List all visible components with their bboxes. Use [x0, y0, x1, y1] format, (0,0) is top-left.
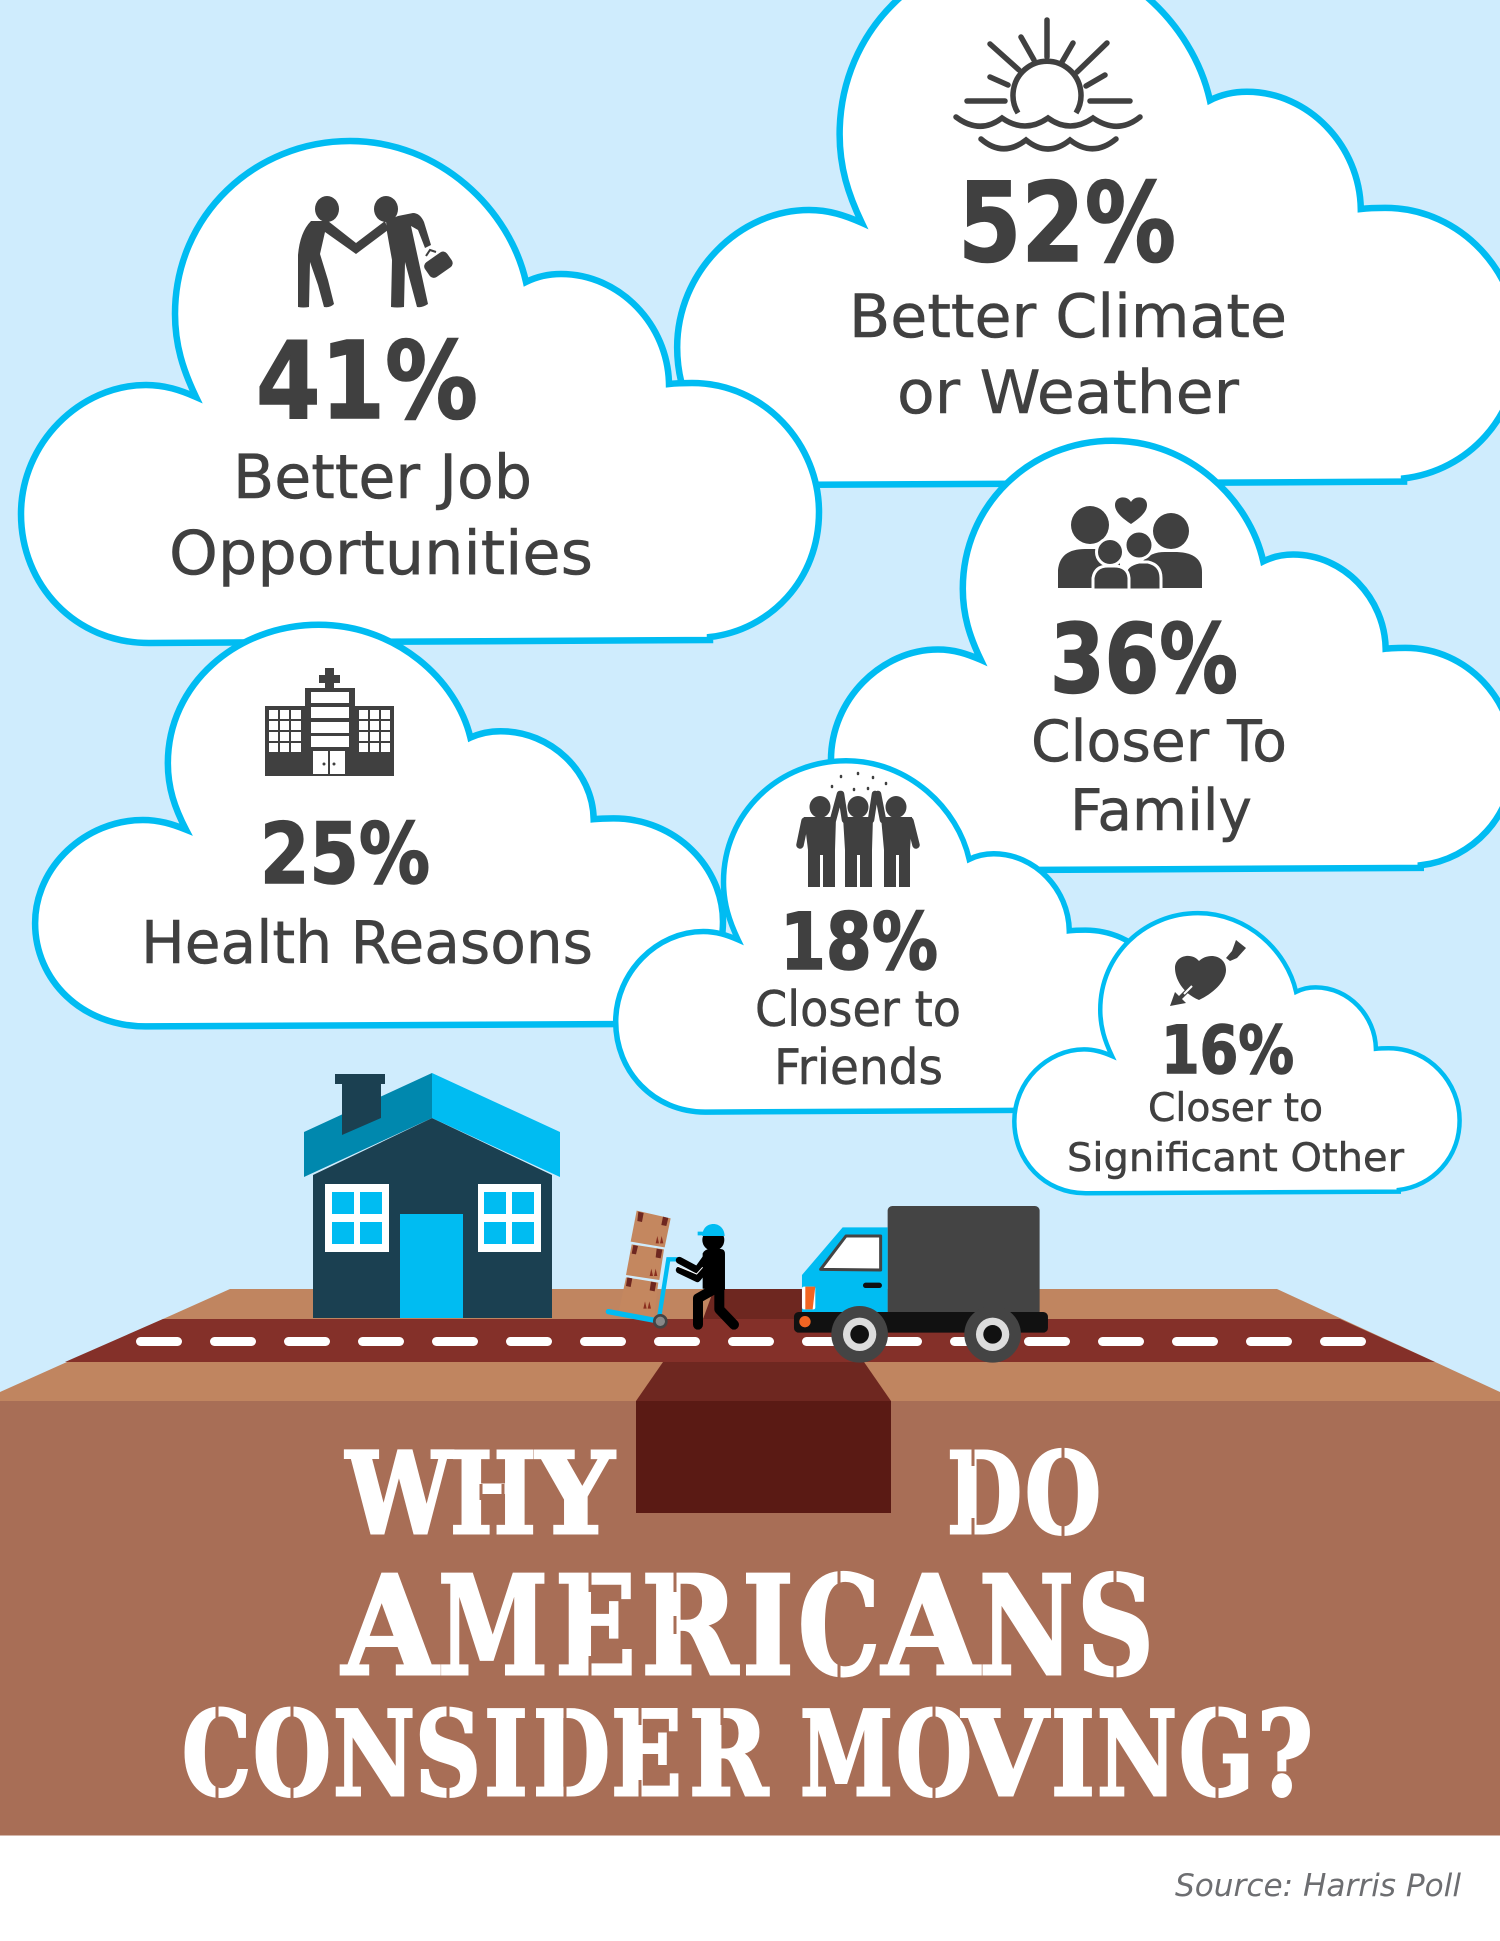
percentage: 41%: 41%	[256, 320, 478, 444]
house	[304, 1073, 560, 1318]
label: Closer to: Closer to	[755, 981, 961, 1038]
title	[182, 1429, 1313, 1823]
icon: sun over water	[956, 20, 1140, 149]
cloud outline: significant other	[1014, 913, 1460, 1193]
title: AMERICANS: I	[742, 1546, 794, 1707]
title: DO: D	[947, 1429, 1022, 1560]
title: WHY: W	[345, 1429, 454, 1560]
label: Better Climate: Better Climate	[849, 282, 1287, 352]
title: AMERICANS: E	[555, 1546, 636, 1707]
rear wheel	[964, 1306, 1021, 1363]
percentage: 25%: 25%	[260, 805, 430, 903]
title: AMERICANS: S	[1077, 1546, 1154, 1707]
house body	[313, 1118, 552, 1318]
source note: Source: Harris Poll	[1175, 1868, 1461, 1904]
title: CONSIDER MOVING?: D	[533, 1685, 610, 1823]
mover with hand truck and boxes	[608, 1211, 734, 1327]
label: Family: Family	[1070, 778, 1252, 844]
icon: three friends high-fiving	[800, 773, 916, 887]
far side road	[703, 1289, 823, 1319]
label: Friends: Friends	[774, 1039, 943, 1096]
title: CONSIDER MOVING?: I	[1051, 1685, 1095, 1823]
stacked boxes	[618, 1211, 671, 1322]
percentage: 36%: 36%	[1050, 605, 1238, 715]
percentage: 52%: 52%	[958, 159, 1176, 287]
chimney	[335, 1074, 385, 1135]
title: CONSIDER MOVING?: V	[961, 1685, 1050, 1823]
mover figure	[677, 1224, 734, 1325]
label: Health Reasons: Health Reasons	[141, 908, 593, 977]
title: CONSIDER MOVING?: ?	[1257, 1685, 1313, 1823]
title: CONSIDER MOVING?: G	[1179, 1685, 1254, 1823]
label: Closer To: Closer To	[1031, 709, 1287, 775]
roof left	[304, 1073, 432, 1177]
panel: health reasons	[35, 625, 723, 1026]
title: WHY: H	[450, 1429, 536, 1560]
title: CONSIDER MOVING?: I	[484, 1685, 528, 1823]
title: CONSIDER MOVING?: M	[800, 1685, 893, 1823]
near side road	[636, 1362, 891, 1401]
title: CONSIDER MOVING?: C	[182, 1685, 251, 1823]
panel: better climate or weather	[677, 0, 1500, 485]
road dashes	[136, 1337, 1366, 1346]
cab window	[821, 1236, 881, 1270]
main road	[65, 1319, 1435, 1362]
title: AMERICANS: A	[340, 1546, 440, 1707]
percentage: 18%: 18%	[780, 898, 938, 988]
ground and road scene	[0, 1289, 1500, 1402]
hand truck	[608, 1259, 677, 1321]
label: Better Job: Better Job	[233, 442, 532, 513]
label: or Weather: or Weather	[897, 358, 1239, 428]
panel: better job opportunities	[21, 141, 819, 643]
label: Significant Other: Significant Other	[1067, 1136, 1405, 1181]
door handle	[863, 1283, 882, 1288]
truck cab	[802, 1227, 888, 1313]
headlight	[802, 1287, 815, 1309]
icon: handshake	[298, 196, 455, 308]
cloud outline: job	[21, 141, 819, 643]
ground top surface	[0, 1289, 1500, 1402]
white footer band	[0, 1836, 1500, 1941]
door	[400, 1214, 463, 1318]
title: AMERICANS: N	[979, 1546, 1074, 1707]
roof right	[432, 1073, 560, 1177]
title: WHY: Y	[535, 1429, 615, 1560]
icon: heart with arrow	[1170, 940, 1246, 1006]
cloud outline: friends	[616, 761, 1174, 1112]
moving truck	[794, 1206, 1048, 1363]
panel: closer to family	[831, 441, 1500, 870]
title: CONSIDER MOVING?: O	[253, 1685, 331, 1823]
hand truck wheel	[654, 1315, 666, 1327]
cloud outline: family	[831, 441, 1500, 870]
front wheel	[831, 1306, 888, 1363]
title: CONSIDER MOVING?: N	[1097, 1685, 1177, 1823]
bumper light	[799, 1316, 811, 1327]
road drop into box	[636, 1401, 891, 1513]
icon: hospital	[265, 668, 394, 776]
label: Closer to: Closer to	[1148, 1086, 1323, 1131]
cloud outline: climate	[677, 0, 1500, 485]
icon: family with heart	[1058, 497, 1202, 590]
label: Opportunities: Opportunities	[169, 518, 593, 589]
chassis	[794, 1312, 1048, 1333]
truck cargo box	[888, 1206, 1040, 1316]
title: DO: O	[1025, 1429, 1101, 1560]
right window	[478, 1184, 541, 1252]
percentage: 16%: 16%	[1161, 1012, 1294, 1089]
cloud outline: health	[35, 625, 723, 1026]
panel: closer to significant other	[1014, 913, 1460, 1193]
title: AMERICANS: R	[641, 1546, 739, 1707]
title: CONSIDER MOVING?: R	[689, 1685, 769, 1823]
title: AMERICANS: M	[438, 1546, 548, 1707]
title: CONSIDER MOVING?: S	[415, 1685, 481, 1823]
left window	[325, 1184, 389, 1252]
box front panel	[0, 1401, 1500, 1836]
title: AMERICANS: C	[798, 1546, 880, 1707]
title: CONSIDER MOVING?: O	[896, 1685, 972, 1823]
title: CONSIDER MOVING?: N	[333, 1685, 415, 1823]
panel: closer to friends	[616, 761, 1174, 1112]
title: CONSIDER MOVING?: E	[611, 1685, 682, 1823]
title: AMERICANS: A	[880, 1546, 981, 1707]
